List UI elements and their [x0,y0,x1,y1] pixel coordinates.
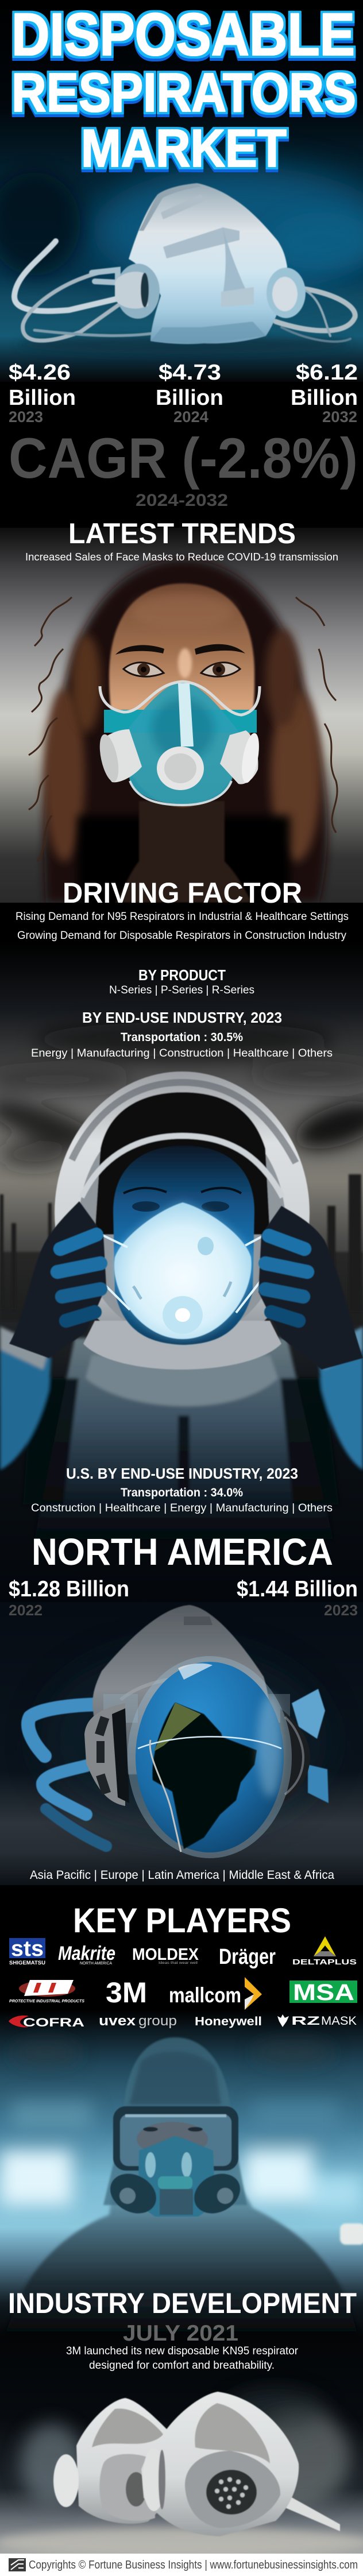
logo: Makrite: NORTH AMERICA [80,1962,112,1966]
logo: Delta Plus: DELTAPLUS [292,1958,357,1966]
stat: 2023 market value: $4.26 [9,361,71,385]
stat: 2024 market value [156,361,223,426]
logo: Mallcom [169,1977,262,2010]
logo: Mallcom: mallcom [169,1983,241,2007]
section: U.S. by end-use industry: Transportation : 34.0% [121,1486,243,1499]
section: by product [109,966,254,996]
worker hood [103,2037,247,2205]
smoke and clouds [0,1022,363,1168]
hero image: respirator on blue background [0,72,363,381]
section: by product: N-Series | P-Series | R-Series [109,984,254,996]
section: U.S. by end-use industry: U.S. BY END-USE INDUSTRY, 2023 [66,1465,298,1482]
eyebrows [115,644,245,655]
stat: north america 2022: 2022 [9,1602,43,1619]
logo: STS Shigematsu: sts [11,1937,44,1961]
logo: Drager: Dräger [219,1945,276,1969]
section: by end-use industry: Energy | Manufacturing | Construction | Healthcare | Others [31,1047,333,1059]
logo: Moldex: MOLDEX [132,1945,199,1964]
stat: 2024 market value: Billion [156,386,223,410]
logo: Moldex: Ideas that wear well [159,1961,198,1965]
eyes [123,663,240,676]
face [113,1146,254,1345]
logo: Cofra: COFRA [23,2016,84,2029]
helmet [55,1072,310,1370]
face [109,583,254,807]
glowing mask [114,1202,252,1339]
development description: 3M launched its new disposable KN95 respirator [66,2345,299,2357]
logo: STS Shigematsu: SHIGEMATSU [9,1960,45,1966]
other regions list: Asia Pacific | Europe | Latin America | Middle East & Africa [30,1869,334,1882]
suit [0,1326,363,1539]
worker goggles [113,2106,238,2171]
logo: 3M: 3M [106,1977,147,2009]
development description [66,2345,299,2372]
neck [115,801,253,903]
stat: north america 2023 [237,1577,358,1619]
right cartridge [220,730,262,784]
centre valve [157,747,204,790]
worker respirator [103,2136,247,2221]
left gloved hand [9,1201,106,1358]
image: astronaut-helmet woman with glowing mask [0,942,363,1608]
development description: designed for comfort and breathability. [89,2360,275,2372]
back white mask [53,2398,172,2524]
image: hazmat worker and white respirators [0,2010,363,2558]
respirator body [129,183,287,344]
right gloved hand [258,1206,363,1370]
stat: north america 2023: 2023 [324,1602,358,1619]
section: by product: BY PRODUCT [138,966,226,984]
stat: 2023 market value: Billion [9,386,76,410]
stat: 2023 market value [9,361,76,426]
stat: 2032 market value: 2032 [322,408,357,426]
blue straps [28,1689,329,1846]
icon: Fortune Business Insights mark [9,2558,26,2571]
driving factor text: Rising Demand for N95 Respirators in Industrial & Healthcare Settings [16,911,349,923]
logo: Cofra [9,2016,84,2029]
logo: Protective Industrial Products: PROTECTIVE INDUSTRIAL PRODUCTS [9,1998,84,2003]
nose highlight [178,648,192,678]
logo: RZ Mask: RZ [291,2014,320,2028]
logo: RZ Mask: MASK [321,2014,357,2028]
logo: MSA: MSA [293,1980,354,2005]
stat: 2024 market value: 2024 [173,408,208,426]
section: by end-use industry: Transportation : 30.5% [121,1031,243,1044]
development date: JULY 2021 [123,2321,238,2346]
title: MARKET [81,118,287,178]
mask straps [79,1224,283,1313]
left cartridge [96,729,142,783]
stat: 2032 market value: Billion [291,386,358,410]
blurred lab lights [0,2043,363,2211]
heading: latest trends: LATEST TRENDS [68,517,296,550]
heading: north america: NORTH AMERICA [32,1530,333,1573]
heading: driving factor: DRIVING FACTOR [63,877,302,909]
mask shell [92,1605,270,1774]
section: U.S. by end-use industry: Construction | Healthcare | Energy | Manufacturing | Others [31,1502,333,1514]
stat: 2032 market value [291,361,358,426]
title [11,1,356,178]
image: respirator with globe visor [0,1602,363,1885]
stat: 2024 market value: $4.73 [159,361,221,385]
worker suit and shoulders [6,2176,357,2331]
section: by end-use industry [31,1009,333,1059]
eyes [123,1188,241,1212]
logo: Delta Plus [292,1936,357,1966]
right head straps [276,287,355,331]
section: by end-use industry: BY END-USE INDUSTRY, 2023 [82,1009,282,1026]
globe visor [128,1656,292,1858]
right filter cartridge [267,268,306,318]
hair [29,560,337,913]
logo: Protective Industrial Products [9,1980,84,2003]
left cartridge [84,1703,129,1806]
city skyline [0,1174,363,1326]
stat: 2023 market value: 2023 [9,408,43,426]
stat: 2032 market value: $6.12 [296,361,358,385]
CAGR figure: 2024-2032 [136,491,228,510]
section: U.S. by end-use industry [31,1465,333,1514]
logo: Makrite: Makrite [58,1943,115,1964]
dust clouds [20,2389,350,2507]
ground dust [0,2528,363,2558]
logo: Honeywell: Honeywell [195,2015,262,2028]
clear respirator [96,681,262,805]
driving factor text [16,911,349,942]
logo: Uvex group: group [138,2013,177,2029]
latest trends text: Increased Sales of Face Masks to Reduce COVID-19 transmission [25,551,338,563]
front white mask [141,2392,340,2536]
logo: RZ Mask [277,2014,357,2028]
footer [0,2554,363,2576]
logo: Uvex group: uvex [99,2013,136,2029]
image: woman wearing clear respirator [0,528,363,913]
stat: north america 2022: $1.28 Billion [9,1577,129,1602]
left filter cartridge [115,264,160,319]
right cartridge [280,1708,310,1803]
heading: key players: KEY PLAYERS [73,1901,291,1940]
driving factor text: Growing Demand for Disposable Respirators in Construction Industry [17,930,346,942]
stat: north america 2022 [9,1577,129,1619]
logo: Uvex group [99,2013,177,2029]
left head straps [14,241,355,342]
